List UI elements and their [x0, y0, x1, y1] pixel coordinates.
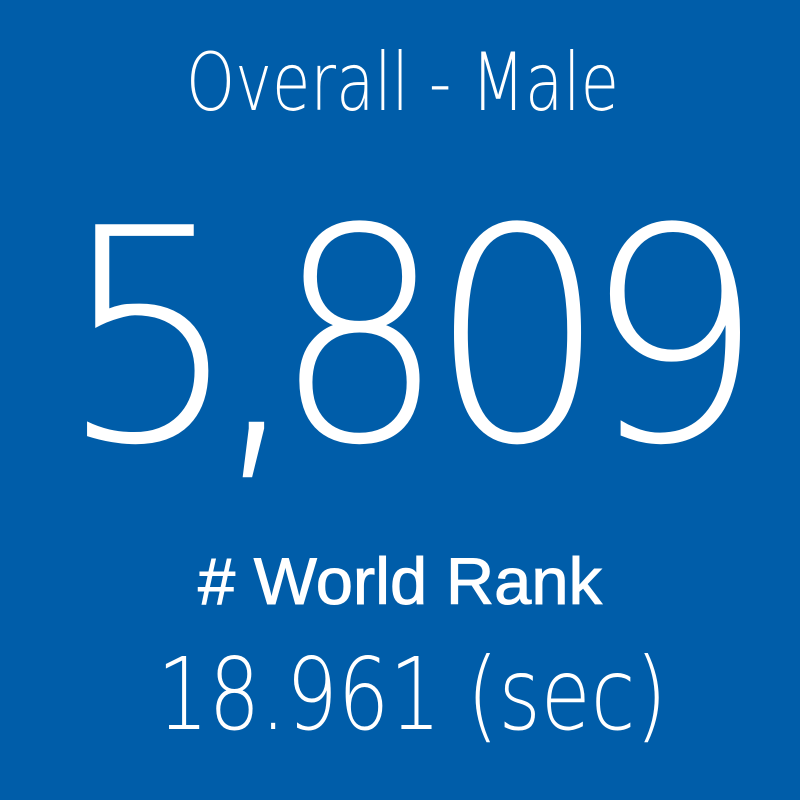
big number — [59, 151, 765, 515]
big number: 0 — [429, 165, 607, 510]
metric label: # World Rank — [198, 544, 603, 618]
big number: 9 — [582, 165, 765, 510]
big number: 8 — [274, 165, 445, 510]
big number: , — [207, 151, 306, 515]
big number: 5 — [59, 165, 240, 510]
time value: 18.961 (sec) — [157, 636, 667, 753]
title: Overall - Male — [186, 36, 619, 129]
